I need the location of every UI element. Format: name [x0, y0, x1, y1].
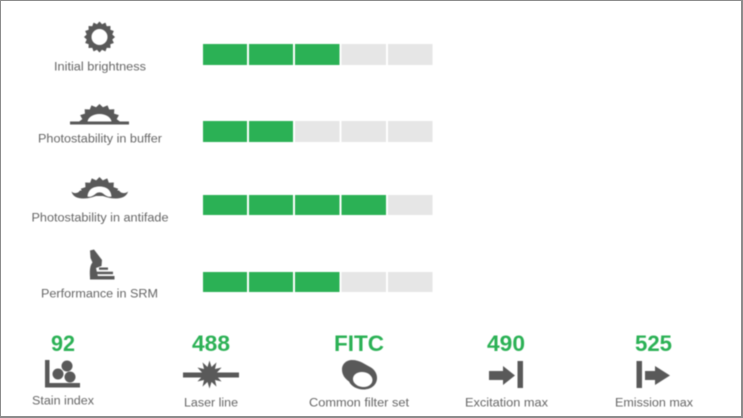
icon: full sun gear — [84, 22, 114, 52]
value: 525: 525 — [635, 331, 672, 356]
value: 92: 92 — [51, 331, 75, 356]
label: photostability in buffer: Photostability in buffer — [38, 134, 162, 146]
label: excitation max: Excitation max — [465, 398, 548, 410]
label: stain index: Stain index — [32, 396, 94, 408]
label: initial brightness: Initial brightness — [54, 62, 146, 74]
icon: arrow into bar — [489, 361, 523, 388]
label: photostability in antifade: Photostability in antifade — [32, 212, 168, 224]
icon: microscope — [90, 250, 114, 280]
row: performance in SRM — [41, 250, 432, 300]
row: photostability in buffer — [38, 104, 432, 146]
rating bar: 3 of 5 — [203, 44, 432, 65]
value: 488: 488 — [192, 331, 230, 356]
icon: half sun on curling wave — [72, 177, 128, 198]
value: 490: 490 — [487, 331, 525, 356]
stat: stain index — [32, 331, 94, 408]
icon: laser burst — [183, 360, 239, 388]
label: laser line: Laser line — [184, 398, 238, 410]
stat: excitation max — [465, 331, 548, 410]
row: initial brightness — [54, 22, 432, 74]
stat: laser line — [183, 331, 239, 410]
icon: half sun on horizon — [70, 104, 129, 130]
stat: emission max — [615, 331, 693, 410]
rating bar: 2 of 5 — [203, 121, 432, 142]
icon: filter cube — [342, 360, 377, 390]
icon: arrow out of bar — [636, 361, 670, 388]
value: FITC: FITC — [334, 331, 384, 356]
row: photostability in antifade — [32, 177, 432, 224]
stat: common filter set — [309, 331, 410, 410]
rating bar: 4 of 5 — [203, 195, 432, 215]
label: common filter set: Common filter set — [309, 398, 410, 410]
label: performance in SRM: Performance in SRM — [41, 288, 158, 300]
icon: scatter plot — [45, 360, 80, 388]
rating bar: 3 of 5 — [203, 272, 432, 292]
label: emission max: Emission max — [615, 398, 693, 410]
